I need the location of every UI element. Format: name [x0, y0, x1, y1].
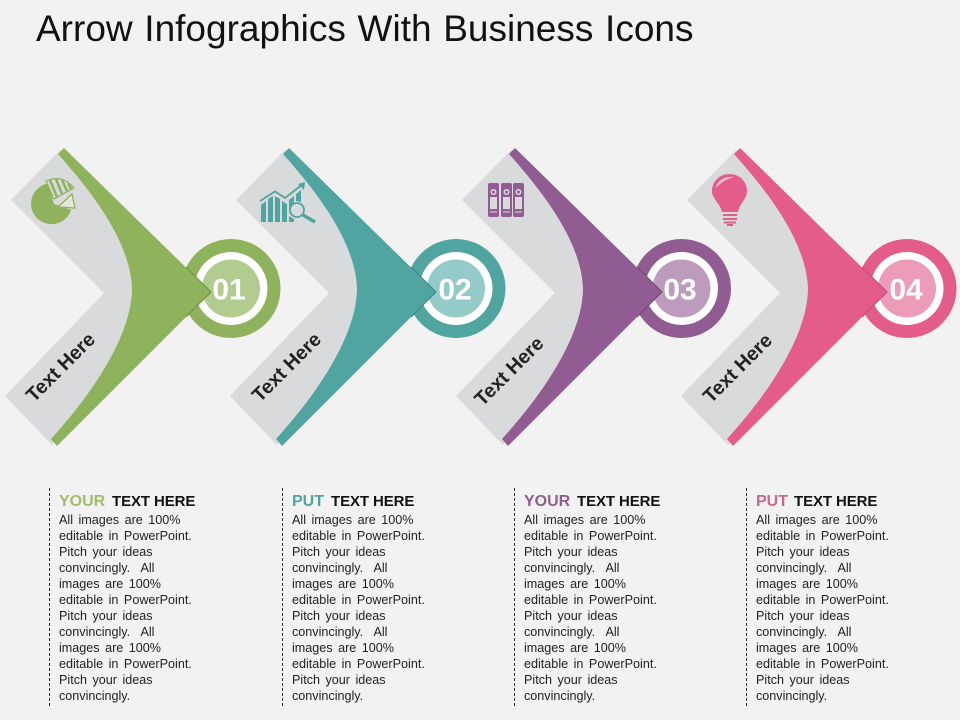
curved arrow head [727, 148, 887, 446]
text block 2: editable in PowerPoint. [292, 657, 425, 671]
text block 2: All images are 100% [292, 513, 414, 527]
text block 2: images are 100% [292, 641, 394, 655]
gray chevron band [456, 150, 596, 445]
label: Text Here: Text Here [699, 330, 777, 408]
text block 2 [282, 488, 472, 706]
text block 3: All images are 100% [524, 513, 646, 527]
text block 3: Pitch your ideas [524, 545, 618, 559]
text block 1: YOUR [59, 493, 105, 510]
text block 3: editable in PowerPoint. [524, 593, 657, 607]
text block 4: TEXT HERE [794, 493, 877, 510]
number circle 03 [632, 239, 731, 338]
text block 4: convincingly. All [756, 625, 851, 639]
arrow group 1: green [5, 148, 280, 446]
text block 2: TEXT HERE [331, 493, 414, 510]
text block 4: Pitch your ideas [756, 609, 850, 623]
text block 2: editable in PowerPoint. [292, 593, 425, 607]
text block 4: editable in PowerPoint. [756, 657, 889, 671]
gray chevron band [5, 150, 145, 445]
text block 2: images are 100% [292, 577, 394, 591]
label: Text Here: Text Here [470, 333, 548, 411]
icon: light bulb [712, 174, 747, 225]
text block 1: convincingly. All [59, 561, 154, 575]
text block 3: images are 100% [524, 577, 626, 591]
text block 2: PUT [292, 493, 324, 510]
text block 1: Pitch your ideas [59, 673, 153, 687]
icon: binders [488, 183, 524, 217]
text block 1: All images are 100% [59, 513, 181, 527]
label: Text Here: Text Here [248, 329, 326, 407]
text block 2: editable in PowerPoint. [292, 529, 425, 543]
text block 1: Pitch your ideas [59, 545, 153, 559]
text block 4: Pitch your ideas [756, 673, 850, 687]
arrow group 4: pink [681, 148, 956, 446]
text block 4: images are 100% [756, 641, 858, 655]
number circle 03: 03 [663, 274, 697, 306]
text block 4: All images are 100% [756, 513, 878, 527]
text block 3: convincingly. All [524, 625, 619, 639]
number circle 04 [858, 239, 956, 338]
text block 1: images are 100% [59, 641, 161, 655]
text block 1: TEXT HERE [112, 493, 195, 510]
icon: pie chart [31, 179, 75, 224]
text block 3: editable in PowerPoint. [524, 657, 657, 671]
label: Text Here: Text Here [22, 329, 100, 407]
text block 1 [49, 488, 239, 706]
text block 3: images are 100% [524, 641, 626, 655]
text block 1: editable in PowerPoint. [59, 593, 192, 607]
text block 3: Pitch your ideas [524, 609, 618, 623]
text block 2: Pitch your ideas [292, 673, 386, 687]
text block 2: convincingly. [292, 689, 363, 703]
text block 4: PUT [756, 493, 788, 510]
number circle 04: 04 [889, 274, 923, 306]
text block 1: editable in PowerPoint. [59, 657, 192, 671]
gray chevron band [681, 150, 821, 445]
text block 1: convincingly. All [59, 625, 154, 639]
gray chevron band [230, 150, 370, 445]
text block 1: images are 100% [59, 577, 161, 591]
text block 2: convincingly. All [292, 625, 387, 639]
arrow group 3: purple [456, 148, 731, 446]
text block 4: convincingly. [756, 689, 827, 703]
text block 3: Pitch your ideas [524, 673, 618, 687]
text block 4: images are 100% [756, 577, 858, 591]
text block 1: editable in PowerPoint. [59, 529, 192, 543]
text block 1: Pitch your ideas [59, 609, 153, 623]
text block 3: YOUR [524, 493, 570, 510]
text block 3: editable in PowerPoint. [524, 529, 657, 543]
text block 4: Pitch your ideas [756, 545, 850, 559]
curved arrow head [51, 148, 211, 446]
curved arrow head [502, 148, 662, 446]
icon: bar chart with magnifier [260, 182, 315, 222]
text block 2: Pitch your ideas [292, 545, 386, 559]
text block 1: convincingly. [59, 689, 130, 703]
number circle 01: 01 [212, 274, 246, 306]
arrow group 2: teal [230, 148, 506, 446]
text block 3 [514, 488, 704, 706]
text block 4 [746, 488, 936, 706]
text block 3: convincingly. [524, 689, 595, 703]
text block 2: Pitch your ideas [292, 609, 386, 623]
text block 3: convincingly. All [524, 561, 619, 575]
curved arrow head [276, 148, 436, 446]
number circle 01 [182, 239, 280, 338]
text block 4: editable in PowerPoint. [756, 593, 889, 607]
text block 2: convincingly. All [292, 561, 387, 575]
text block 3: TEXT HERE [577, 493, 660, 510]
title: Arrow Infographics With Business Icons [36, 8, 693, 49]
number circle 02 [406, 239, 506, 338]
text block 4: editable in PowerPoint. [756, 529, 889, 543]
number circle 02: 02 [438, 274, 472, 306]
text block 4: convincingly. All [756, 561, 851, 575]
